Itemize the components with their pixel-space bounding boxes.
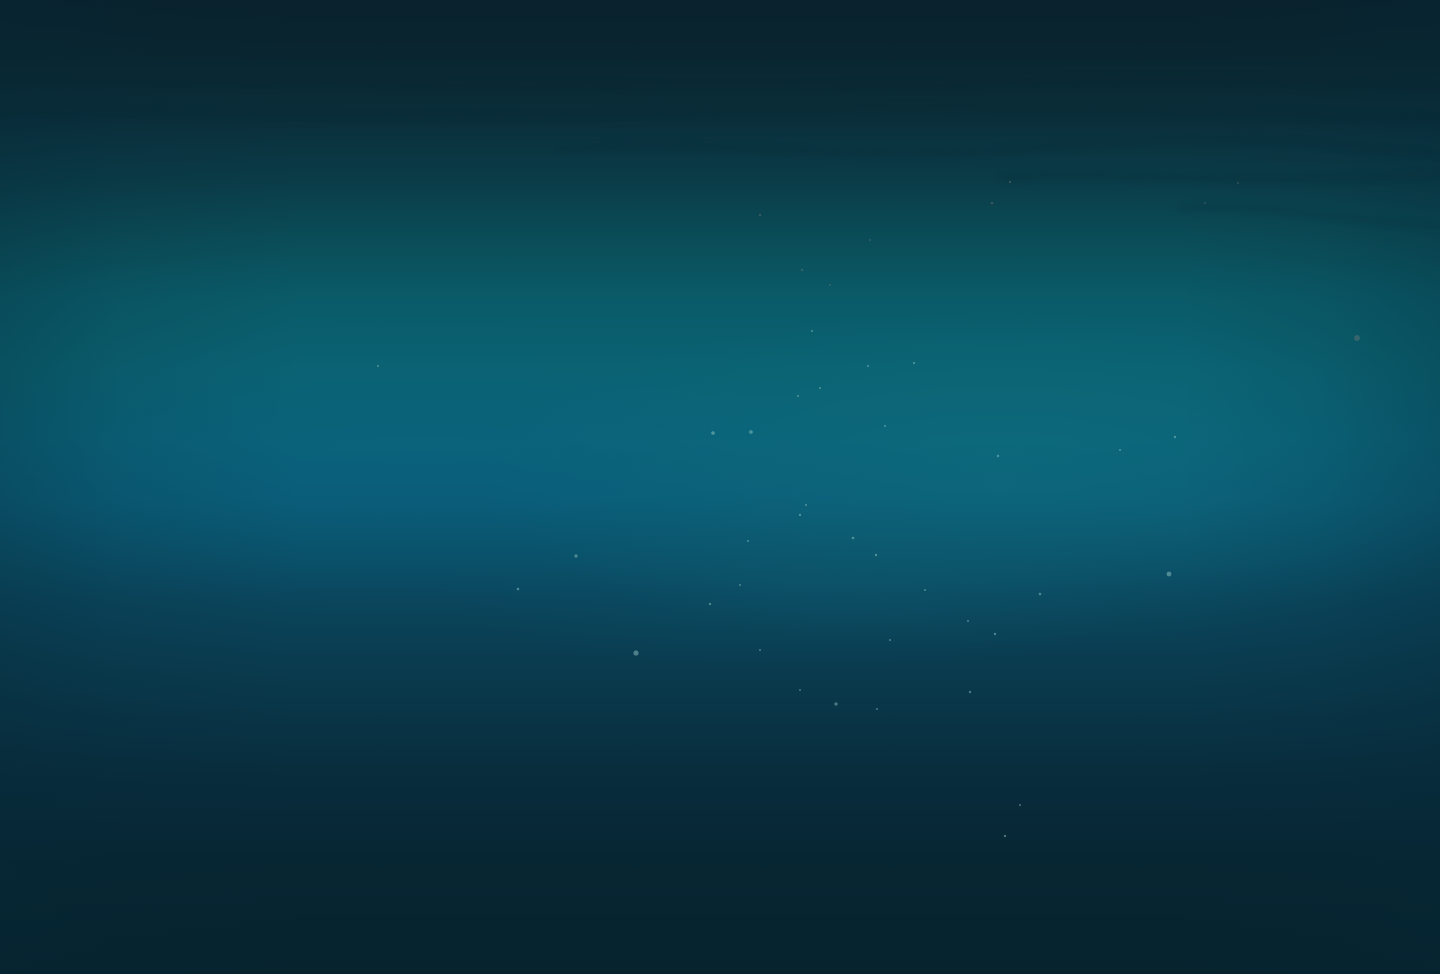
pale specks in the water	[377, 330, 1176, 837]
warm specks near surface	[759, 181, 1360, 341]
